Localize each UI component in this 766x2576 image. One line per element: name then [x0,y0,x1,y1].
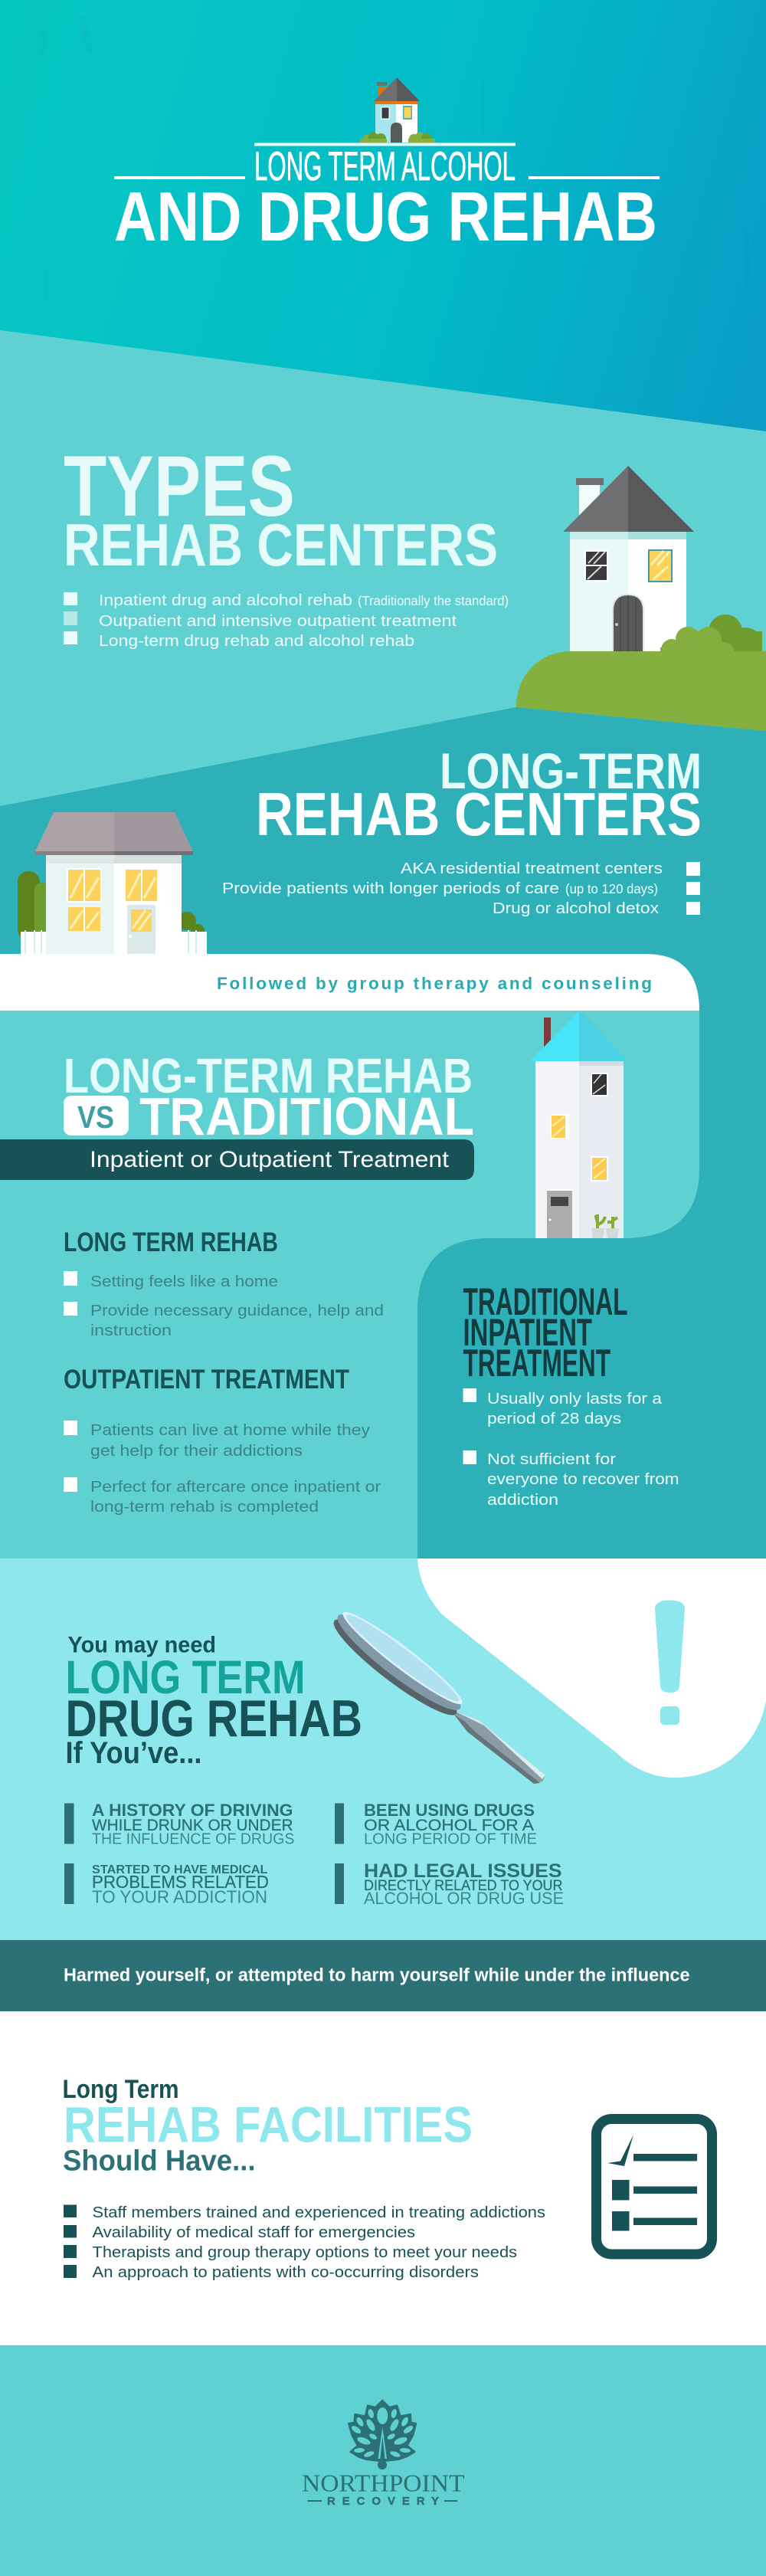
panel: comparison section background [0,1011,766,1559]
list: types of rehab: (Traditionally the standard) [358,593,509,608]
banner: harmed yourself: Harmed yourself, or attempted to harm yourself while under the influence [64,1965,689,1986]
icon: checklist [596,2119,712,2254]
panel: long term rehab list: instruction [90,1322,172,1339]
list: types of rehab: Inpatient drug and alcohol rehab [99,592,352,609]
icon: magnifying glass [326,1604,545,1784]
icon: house on hill [516,466,766,731]
list: types of rehab: Outpatient and intensive outpatient treatment [99,612,457,630]
panel: types of rehab background [0,330,766,843]
list item: medical problems: TO YOUR ADDICTION [92,1886,267,1906]
list: what facilities should have: An approach to patients with co-occurring disorders [92,2263,479,2281]
icon: peacock leaf fan [349,2401,416,2469]
list: types of rehab: Long-term drug rehab and alcohol rehab [99,632,414,650]
panel: header background [0,0,766,437]
panel: facilities section background [0,2011,766,2345]
list item: legal issues: DIRECTLY RELATED TO YOUR [364,1877,562,1894]
heading: long-term rehab centers [256,742,702,848]
list: long-term rehab features: (up to 120 days) [565,881,658,896]
panel: outpatient treatment list: OUTPATIENT TREATMENT [64,1365,349,1395]
list item: legal issues [335,1860,564,1908]
panel: traditional inpatient treatment: INPATIENT [463,1311,592,1354]
heading: you may need long term drug rehab: LONG TERM [66,1651,305,1703]
list: long-term rehab features: Drug or alcohol detox [493,900,660,917]
logo: northpoint recovery: RECOVERY [327,2495,439,2508]
heading: long term rehab facilities: Should Have... [63,2145,256,2178]
panel: group therapy banner: Followed by group therapy and counseling [217,974,652,993]
panel: long term rehab list [64,1227,384,1339]
list item: history of driving: WHILE DRUNK OR UNDER [92,1817,293,1834]
panel: traditional inpatient treatment: TRADITIONAL [463,1280,628,1323]
panel: outpatient treatment list [64,1365,381,1516]
vs badge [64,1096,129,1136]
list: what facilities should have: Staff members trained and experienced in treating addictions [92,2204,545,2221]
title line 1: LONG TERM ALCOHOL [254,144,516,189]
panel: traditional inpatient treatment: Not sufficient for [487,1450,616,1468]
heading: long term rehab facilities [63,2075,473,2178]
list: long-term rehab features: AKA residential treatment centers [401,860,663,877]
list: types of rehab [64,592,509,650]
list: what facilities should have: Availability of medical staff for emergencies [92,2224,415,2241]
panel: traditional inpatient treatment: everyone to recover from [487,1470,679,1488]
icon: tall tower house [530,1011,629,1238]
panel: footer background [0,2345,766,2576]
list item: medical problems: PROBLEMS RELATED [92,1872,269,1892]
panel: outpatient treatment list: get help for their addictions [90,1442,303,1460]
subheading bar: inpatient or outpatient: Inpatient or Outpatient Treatment [90,1147,450,1172]
heading: you may need long term drug rehab: DRUG REHAB [66,1689,362,1748]
list item: legal issues: ALCOHOL OR DRUG USE [364,1889,564,1908]
list item: using drugs or alcohol: OR ALCOHOL FOR A [364,1817,534,1834]
panel: outpatient treatment list: long-term rehab is completed [90,1498,319,1516]
subheading bar: inpatient or outpatient [0,1139,474,1180]
list item: history of driving: A HISTORY OF DRIVING [92,1801,293,1820]
panel: long term rehab list: Provide necessary guidance, help and [90,1302,384,1319]
hill [516,651,766,731]
heading: long-term rehab vs traditional: LONG-TERM REHAB [64,1048,473,1103]
list: long-term rehab features: Provide patients with longer periods of care [222,880,559,897]
panel: group therapy banner [0,954,699,1011]
banner: harmed yourself [0,1940,766,2011]
logo: northpoint recovery [302,2401,465,2508]
header title block [114,77,660,256]
list item: using drugs or alcohol [335,1801,537,1848]
heading: long-term rehab vs traditional [64,1048,474,1146]
heading: types rehab centers [64,438,498,578]
panel: traditional inpatient treatment: Usually only lasts for a [487,1390,663,1408]
vs badge: VS [77,1100,114,1135]
panel: traditional inpatient treatment [463,1280,679,1509]
list: what facilities should have: Therapists and group therapy options to meet your needs [92,2243,517,2261]
icon: two-storey house with fence [18,812,207,954]
heading: you may need long term drug rehab [66,1632,362,1770]
list item: history of driving: THE INFLUENCE OF DRUGS [92,1831,294,1848]
list: what facilities should have [64,2204,545,2281]
panel: long term rehab list: LONG TERM REHAB [64,1227,278,1257]
panel: outpatient treatment list: Patients can live at home while they [90,1421,371,1439]
title line 2: AND DRUG REHAB [114,179,657,256]
list: long-term rehab features [222,860,700,917]
heading: you may need long term drug rehab: You may need [67,1632,216,1658]
heading: types rehab centers: REHAB CENTERS [64,511,498,578]
list item: using drugs or alcohol: LONG PERIOD OF TIME [364,1831,537,1848]
list item: history of driving [64,1801,294,1848]
heading: types rehab centers: TYPES [64,438,295,534]
heading: long-term rehab vs traditional: TRADITIONAL [139,1086,474,1146]
list item: medical problems [64,1863,269,1906]
panel: warning signs background [0,1558,766,1941]
panel: outpatient treatment list: Perfect for aftercare once inpatient or [90,1478,381,1496]
heading: you may need long term drug rehab: If You’ve... [66,1736,202,1770]
heading: long-term rehab centers: LONG-TERM [440,742,702,799]
icon: small house on title [360,77,435,144]
panel: traditional inpatient treatment: TREATMENT [463,1342,611,1385]
list item: legal issues: HAD LEGAL ISSUES [364,1860,562,1882]
callout: white blob with exclamation mark [417,1558,766,1778]
logo: northpoint recovery: NORTHPOINT [302,2469,465,2496]
heading: long term rehab facilities: Long Term [63,2075,179,2104]
panel: traditional inpatient treatment: period of 28 days [487,1410,621,1427]
list item: using drugs or alcohol: BEEN USING DRUGS [364,1801,535,1820]
panel: long term rehab list: Setting feels like a home [90,1273,278,1290]
panel: traditional inpatient treatment: addiction [487,1491,558,1509]
heading: long term rehab facilities: REHAB FACILITIES [64,2096,473,2153]
list item: medical problems: STARTED TO HAVE MEDICAL [92,1863,268,1876]
panel: long-term rehab centers background [0,707,766,1019]
